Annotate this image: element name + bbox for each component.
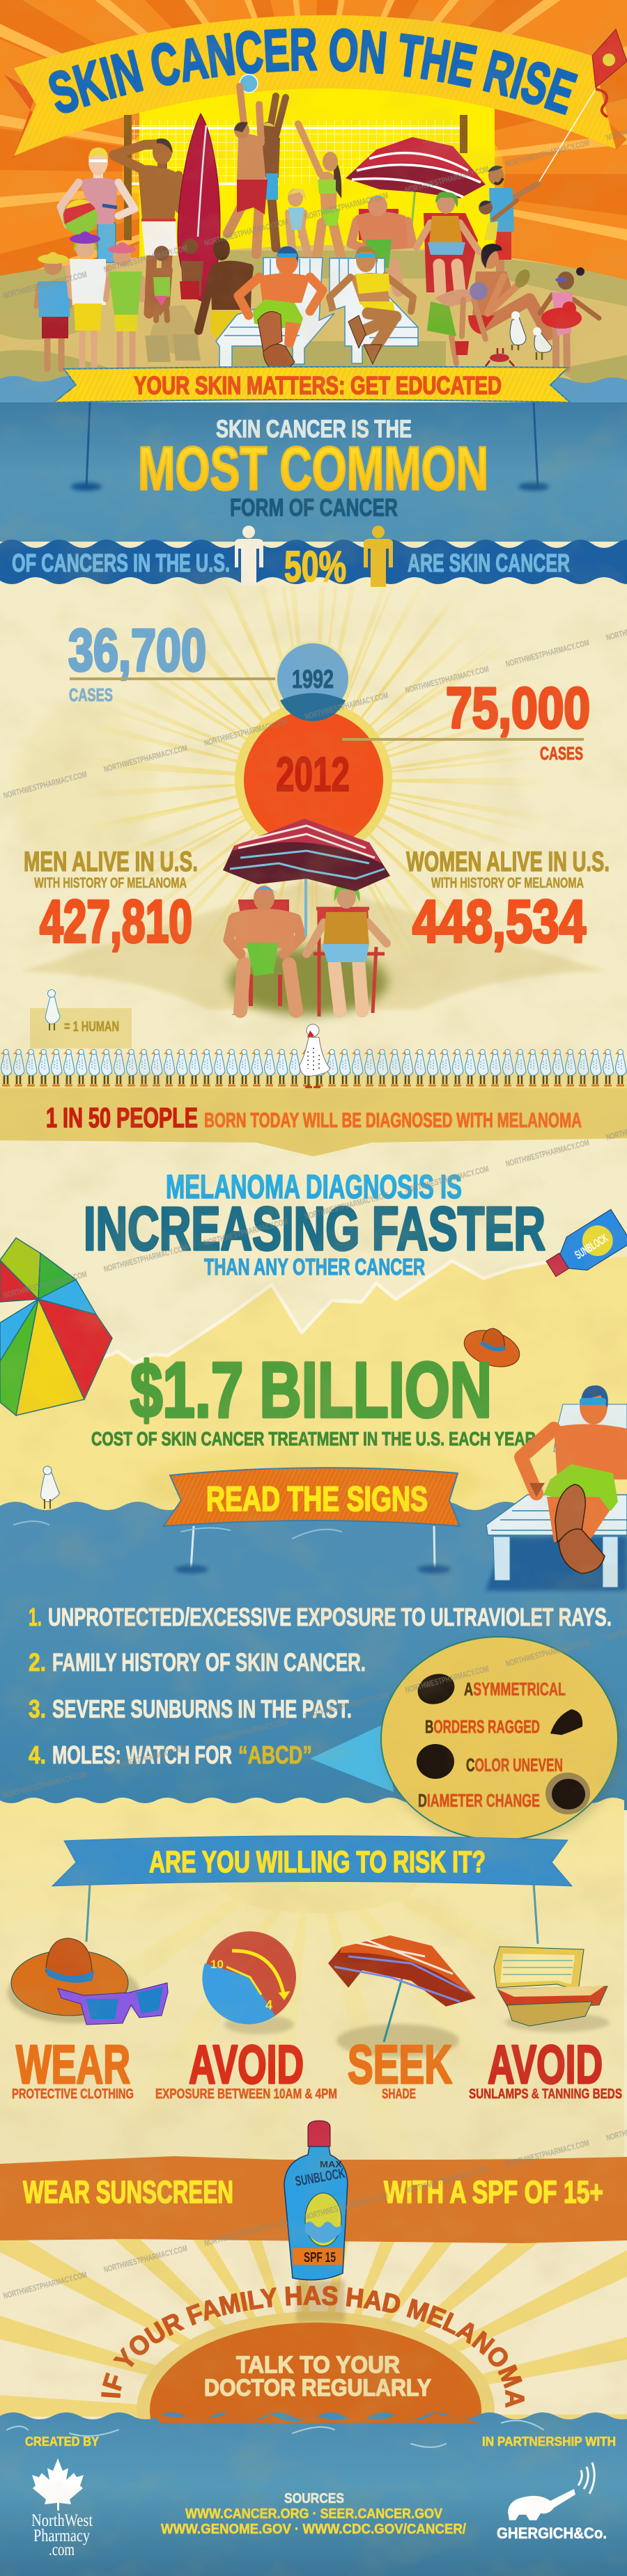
item 4: 4. <box>29 1741 46 1769</box>
1992 cases number: 36,700 <box>68 618 206 684</box>
seagulls and crab on beach <box>486 311 552 366</box>
watermarks: NORTHWESTPHARMACY.COM <box>304 2192 389 2222</box>
item 2 <box>29 1648 366 1676</box>
water strip at shoreline <box>0 376 627 404</box>
text: talk to your doctor: DOCTOR REGULARLY <box>204 2375 431 2401</box>
watermarks: NORTHWESTPHARMACY.COM <box>203 2218 289 2249</box>
band: 1 in 50 people <box>0 1088 627 1156</box>
prevention tip: seek: SHADE <box>382 2087 416 2102</box>
item 1: 1. <box>29 1603 42 1631</box>
icon: sunblock bottle <box>284 2121 348 2322</box>
panel: beach scene background <box>0 0 627 418</box>
heading bottom: THAN ANY OTHER CANCER <box>204 1254 425 1280</box>
logo: maple leaf <box>32 2458 84 2511</box>
illustration: man on lounger <box>486 1385 627 1591</box>
surfboard <box>178 113 220 301</box>
1992 sun <box>275 641 350 721</box>
icon: yellow person <box>364 526 393 587</box>
2012 label: 2012 <box>276 747 350 801</box>
2012 cases label: CASES <box>540 743 583 764</box>
prevention tip: avoid exposure: EXPOSURE BETWEEN 10AM & 4PM <box>155 2087 337 2102</box>
logo: ghergich elephant <box>497 2463 607 2542</box>
umbrella over couple <box>223 819 390 936</box>
small seagull <box>41 1466 59 1509</box>
subtitle banner <box>54 367 570 402</box>
sun ring <box>137 2311 495 2509</box>
panel: footer water <box>0 2412 627 2576</box>
mole A <box>413 1669 566 1709</box>
old woman <box>307 883 387 1011</box>
straw hat <box>460 1324 524 1373</box>
cost figure: $1.7 BILLION <box>130 1346 492 1434</box>
stat: women with melanoma history: 448,534 <box>412 888 586 955</box>
item 2: FAMILY HISTORY OF SKIN CANCER. <box>52 1648 366 1676</box>
bottle label sunblock: SUNBLOCK <box>294 2166 346 2190</box>
icon: tanning bed <box>494 1947 610 2032</box>
arc text: if your family has had melanoma: IF YOUR FAMILY HAS HAD MELANOMA <box>101 2286 525 2408</box>
watermarks: NORTHWESTPHARMACY.COM <box>304 1691 389 1722</box>
sunblock bottle tipped <box>541 1209 627 1286</box>
stat: men with melanoma history: WITH HISTORY OF MELANOMA <box>34 875 187 891</box>
banner text: ARE YOU WILLING TO RISK IT? <box>149 1845 486 1879</box>
trend line <box>100 1261 550 1363</box>
mole C <box>417 1744 563 1779</box>
item 3 <box>29 1695 352 1723</box>
2012 sun <box>235 701 392 858</box>
watermarks: NORTHWESTPHARMACY.COM <box>103 2245 189 2275</box>
watermarks: NORTHWESTPHARMACY.COM <box>103 1744 189 1775</box>
stat: women with melanoma history <box>406 847 610 955</box>
prevention tip: seek: SEEK <box>348 2034 452 2095</box>
banner: are you willing to risk it <box>52 1836 572 1944</box>
bottle label spf: SPF 15 <box>304 2250 336 2265</box>
text: talk to your doctor: TALK TO YOUR <box>236 2352 400 2378</box>
watermarks: NORTHWESTPHARMACY.COM <box>505 2139 590 2169</box>
text: of cancers: OF CANCERS IN THE U.S. <box>12 549 230 577</box>
bending boy with bucket <box>427 282 488 363</box>
mole B: BORDERS RAGGED <box>425 1716 540 1737</box>
item 3: 3. <box>29 1695 46 1723</box>
watermarks: NORTHWESTPHARMACY.COM <box>405 1165 490 1195</box>
watermarks: NORTHWESTPHARMACY.COM <box>203 1218 289 1248</box>
sandcastle <box>145 305 201 362</box>
watermarks: NORTHWESTPHARMACY.COM <box>203 218 289 249</box>
icon: white person <box>235 526 263 586</box>
logo text: northwest pharmacy <box>31 2511 93 2559</box>
watermarks: NORTHWESTPHARMACY.COM <box>304 691 389 722</box>
female volleyball player <box>298 124 341 259</box>
prevention tip: wear <box>12 2034 134 2102</box>
sources: WWW.GENOME.GOV · WWW.CDC.GOV/CANCER/ <box>161 2522 466 2537</box>
mole D <box>418 1773 590 1814</box>
mole D: DIAMETER CHANGE <box>418 1790 540 1811</box>
sand <box>0 245 627 397</box>
1992 leader line <box>70 677 286 680</box>
2012 leader line <box>342 738 584 741</box>
watermarks: NORTHWESTPHARMACY.COM <box>203 718 289 748</box>
seated dark man <box>199 238 252 339</box>
panel: family history sunrise <box>0 2239 627 2419</box>
clock number 10: 10 <box>210 1958 224 1971</box>
sources: SOURCES <box>284 2491 344 2506</box>
item 3: SEVERE SUNBURNS IN THE PAST. <box>52 1695 352 1723</box>
beach illustration: people and props <box>36 29 627 371</box>
sources <box>161 2491 466 2537</box>
prevention tip: avoid exposure: AVOID <box>189 2034 304 2095</box>
crouching woman <box>288 189 308 256</box>
logo text: northwest pharmacy: NorthWest <box>31 2511 93 2530</box>
watermarks: NORTHWESTPHARMACY.COM <box>203 1718 289 1748</box>
prevention tip: wear: PROTECTIVE CLOTHING <box>12 2087 134 2102</box>
logo text: GHERGICH&Co. <box>497 2524 607 2542</box>
watermarks: NORTHWESTPHARMACY.COM <box>505 1139 590 1169</box>
highlighted gull <box>300 1024 330 1087</box>
subtitle text: YOUR SKIN MATTERS: GET EDUCATED <box>134 371 502 400</box>
stat: men with melanoma history: MEN ALIVE IN U.S. <box>24 847 198 877</box>
prevention tip: avoid exposure <box>155 2034 337 2102</box>
clock number 4: 4 <box>265 1998 272 2012</box>
partnership: IN PARTNERSHIP WITH <box>482 2435 616 2449</box>
illustration: couple under umbrella <box>223 819 390 1016</box>
old man <box>229 886 305 1015</box>
panel: read the signs water <box>0 1502 627 1810</box>
text: talk to your doctor <box>204 2352 431 2401</box>
watermarks: NORTHWESTPHARMACY.COM <box>505 139 590 169</box>
text: 50 percent: 50% <box>284 543 346 591</box>
heading most common: MOST COMMON <box>138 434 488 503</box>
lounger man <box>216 246 334 371</box>
panel: melanoma increasing faster chart <box>0 1169 627 1521</box>
striped umbrella <box>346 137 486 233</box>
band text left: WEAR SUNSCREEN <box>23 2174 233 2210</box>
heading line 1: SKIN CANCER IS THE <box>216 416 412 443</box>
watermarks: NORTHWESTPHARMACY.COM <box>405 2165 490 2196</box>
watermarks: NORTHWESTPHARMACY.COM <box>103 1244 189 1275</box>
item 2: 2. <box>29 1648 46 1676</box>
children at left <box>36 231 203 369</box>
male volleyball player behind <box>261 96 286 248</box>
logo text: northwest pharmacy: Pharmacy <box>33 2527 90 2545</box>
watermarks: NORTHWESTPHARMACY.COM <box>3 2271 88 2301</box>
woman applying sunscreen <box>468 244 548 334</box>
watermarks: NORTHWESTPHARMACY.COM <box>103 744 189 775</box>
title banner <box>4 15 627 159</box>
created by: CREATED BY <box>25 2435 99 2449</box>
panel: lower sand background <box>0 1798 624 2164</box>
girl with duck float <box>540 267 599 369</box>
band: 50 percent statistic <box>0 526 627 591</box>
sun body <box>150 2323 481 2498</box>
bottle label max: MAX <box>320 2159 342 2169</box>
watermarks: NORTHWESTPHARMACY.COM <box>304 1191 389 1222</box>
watermarks: NORTHWESTPHARMACY.COM <box>505 1639 590 1669</box>
panel: most common form of cancer <box>0 402 627 542</box>
tan man shading eyes <box>114 139 181 313</box>
callout: ABCD moles magnifier <box>310 1637 621 1846</box>
1992 cases label: CASES <box>69 684 113 705</box>
area under trend line <box>0 1257 627 1511</box>
panel: cream stats background <box>14 586 531 952</box>
sources: WWW.CANCER.ORG · SEER.CANCER.GOV <box>185 2506 443 2522</box>
mole A: ASYMMETRICAL <box>464 1679 566 1699</box>
chart: 1992 vs 2012 suns <box>68 618 590 858</box>
watermarks: NORTHWESTPHARMACY.COM <box>304 191 389 222</box>
watermarks: NORTHWESTPHARMACY.COM <box>3 771 88 801</box>
man and boy flying the kite <box>479 166 538 278</box>
1992 label: 1992 <box>292 665 334 693</box>
band: wear sunscreen <box>0 2156 627 2243</box>
jumping player with volleyball <box>228 74 268 254</box>
item 4: “ABCD” <box>238 1741 312 1769</box>
banner text: READ THE SIGNS <box>206 1479 428 1518</box>
gull row: 1 in 50 <box>0 1024 627 1089</box>
chairs <box>238 902 385 1016</box>
mole C: COLOR UNEVEN <box>466 1754 563 1775</box>
watermarks: NORTHWESTPHARMACY.COM <box>3 271 88 301</box>
2012 cases number: 75,000 <box>446 675 590 740</box>
old couple on red chairs <box>351 191 479 292</box>
colourful beach umbrella <box>0 1238 112 1415</box>
heading line 3: FORM OF CANCER <box>230 494 398 521</box>
watermarks: NORTHWESTPHARMACY.COM <box>3 1770 88 1800</box>
heading top: MELANOMA DIAGNOSIS IS <box>166 1169 462 1206</box>
watermarks: NORTHWESTPHARMACY.COM <box>405 1665 490 1695</box>
icon: clock 10 to 4 <box>202 1931 296 2034</box>
watermarks: NORTHWESTPHARMACY.COM <box>103 244 189 275</box>
kite and string <box>538 29 627 184</box>
shade under couple <box>21 881 606 1015</box>
lounger woman <box>330 246 418 364</box>
stat: men with melanoma history <box>24 847 198 955</box>
watermarks: NORTHWESTPHARMACY.COM <box>3 1271 88 1301</box>
stat: men with melanoma history: 427,810 <box>40 888 192 955</box>
title text: SKIN CANCER ON THE RISE <box>49 28 578 116</box>
item 4: MOLES: WATCH FOR <box>52 1741 232 1769</box>
watermarks: NORTHWESTPHARMACY.COM <box>405 665 490 696</box>
legend: one gull equals one human: = 1 HUMAN <box>64 1019 119 1035</box>
logo text: northwest pharmacy: .com <box>49 2540 75 2559</box>
watermarks: NORTHWESTPHARMACY.COM <box>405 165 490 196</box>
legend: one gull equals one human <box>30 990 132 1049</box>
band text bold: 1 IN 50 PEOPLE <box>46 1103 198 1133</box>
panel: risk factors list <box>29 1603 612 1769</box>
prevention tip: wear: WEAR <box>16 2034 130 2095</box>
volleyball net <box>124 115 467 240</box>
prevention tip: seek <box>348 2034 452 2102</box>
read the signs banner <box>164 1468 460 1526</box>
sunburned man with beach ball <box>61 148 134 262</box>
watermarks: NORTHWESTPHARMACY.COM <box>505 639 590 669</box>
icon: umbrella for shade <box>328 1935 476 2057</box>
icon: hat and sunglasses <box>8 1938 168 2025</box>
